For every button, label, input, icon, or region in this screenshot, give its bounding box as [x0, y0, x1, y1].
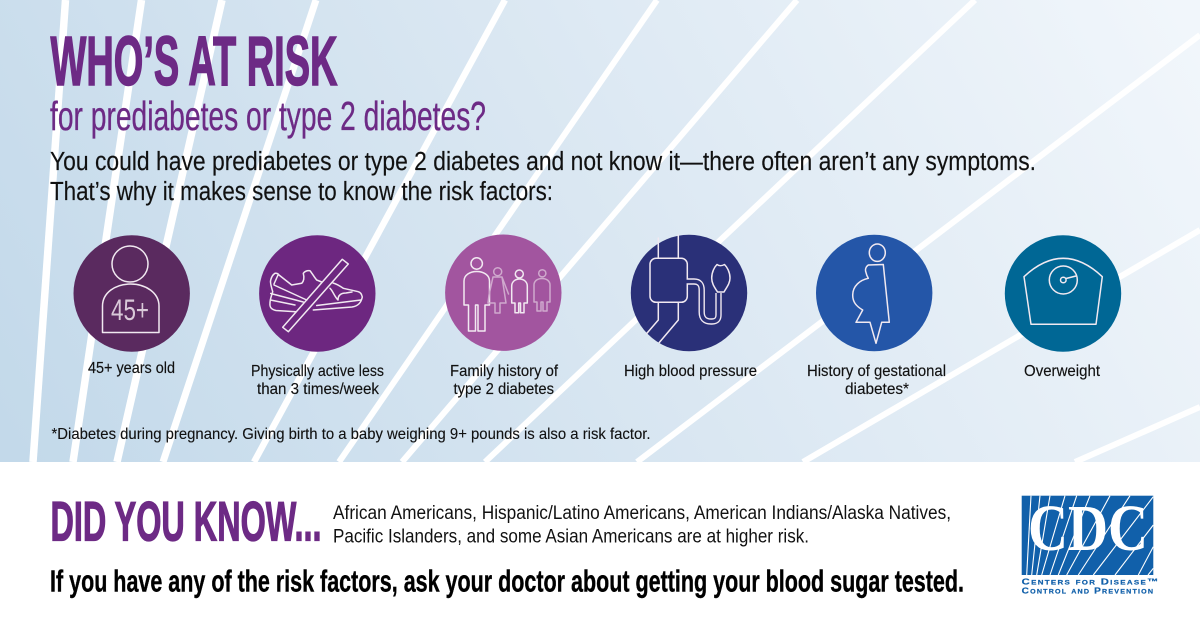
background panel: [0, 0, 1200, 462]
icon: person 45+: [74, 235, 190, 352]
did you know text: [333, 503, 951, 548]
risk factor: family history: [445, 235, 562, 398]
risk factor: age 45+: [74, 235, 190, 377]
label: family history: type 2 diabetes: [454, 381, 554, 398]
title: WHO’S AT RISK: [50, 22, 338, 100]
icon: family: [445, 235, 562, 351]
icon: blood pressure cuff: [631, 235, 747, 351]
label: physical activity: [251, 363, 384, 398]
intro text: That’s why it makes sense to know the risk factors:: [50, 178, 553, 206]
intro text: You could have prediabetes or type 2 diabetes and not know it—there often aren’t any symptoms.: [50, 148, 1036, 176]
label: age: 45+ years old: [88, 360, 175, 377]
CDC logo: Centers for Disease™: [1022, 576, 1160, 586]
did you know text: Pacific Islanders, and some Asian Americans are at higher risk.: [333, 527, 809, 548]
label: physical activity: Physically active less: [251, 363, 384, 380]
label: family history: Family history of: [450, 363, 559, 380]
did you know heading: DID YOU KNOW...: [50, 490, 322, 553]
CDC logo: CDC: [1028, 492, 1148, 565]
label: gestational diabetes: [807, 363, 946, 398]
bottom white panel: [0, 462, 1200, 630]
risk factor: gestational diabetes: [807, 235, 946, 398]
label: overweight: Overweight: [1024, 363, 1101, 380]
did you know text: African Americans, Hispanic/Latino Americans, American Indians/Alaska Natives,: [333, 503, 951, 524]
label: family history: [450, 363, 559, 398]
CDC logo: [1022, 492, 1160, 595]
risk factor: high blood pressure: [624, 235, 757, 380]
icon: crossed-out shoe: [259, 235, 375, 352]
label: physical activity: than 3 times/week: [257, 381, 380, 398]
CDC logo: Control and Prevention: [1022, 585, 1154, 595]
label: high blood pressure: High blood pressure: [624, 363, 757, 380]
label: gestational diabetes: diabetes*: [845, 381, 909, 398]
label: gestational diabetes: History of gestational: [807, 363, 946, 380]
icon: pregnant woman: [816, 235, 932, 351]
risk factor: overweight: [1005, 235, 1121, 380]
risk factor: physical activity: [251, 235, 384, 398]
intro text: [50, 148, 1036, 206]
footnote: *Diabetes during pregnancy. Giving birth to a baby weighing 9+ pounds is also a risk factor.: [52, 426, 650, 443]
subtitle: for prediabetes or type 2 diabetes?: [50, 93, 486, 139]
icon: person 45+: 45+: [111, 294, 149, 327]
icon: weight scale: [1005, 235, 1121, 352]
